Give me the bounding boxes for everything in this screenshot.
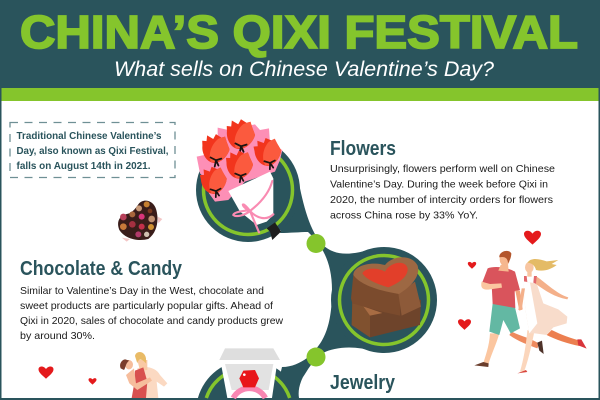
subtitle: What sells on Chinese Valentine’s Day? (114, 58, 494, 81)
header banner (0, 0, 600, 101)
text: Flowers body: across China rose by 33% YoY. (330, 210, 478, 222)
title: CHINA’S QIXI FESTIVAL (20, 6, 578, 58)
text: Chocolate body: Similar to Valentine’s Day in the West, chocolate and (20, 285, 264, 297)
icon: heart-shaped chocolate (351, 257, 421, 337)
text: Flowers body (330, 163, 555, 222)
illustration: embracing couple (120, 352, 167, 398)
icon: heart (38, 366, 54, 379)
icon: heart (524, 231, 541, 245)
connector network (196, 138, 437, 398)
callout: date note (10, 122, 175, 178)
text: Flowers body: Valentine’s Day. During the week before Qixi in (330, 178, 548, 190)
callout: date note: Day, also known as Qixi Festival, (16, 145, 169, 157)
page frame (0, 88, 600, 400)
callout: date note: falls on August 14th in 2021. (16, 160, 151, 172)
text: Chocolate body: Qixi in 2020, sales of chocolate and candy products grew (20, 315, 283, 327)
text: Chocolate body: by around 30%. (20, 330, 95, 342)
heading: Jewelry: Jewelry (330, 372, 396, 394)
icon: heart (468, 262, 476, 269)
text: Flowers body: Unsurprisingly, flowers perform well on Chinese (330, 163, 555, 175)
green band (0, 88, 600, 101)
icon: heart (458, 319, 471, 330)
illustration: running couple (474, 251, 587, 373)
text: Chocolate body (20, 285, 283, 342)
heading: Chocolate & Candy: Chocolate & Candy (20, 258, 183, 280)
text: Flowers body: 2020, the number of intercity orders for flowers (330, 194, 553, 206)
icon: flower bouquet (197, 118, 282, 240)
icon: heart (88, 378, 96, 385)
heading: Flowers: Flowers (330, 138, 396, 160)
text: Chocolate body: sweet products are particularly popular gifts. Ahead of (20, 300, 273, 312)
icon: ring box (219, 348, 280, 398)
callout: date note: Traditional Chinese Valentine’s (16, 130, 162, 142)
icon: chocolate box (118, 201, 162, 242)
